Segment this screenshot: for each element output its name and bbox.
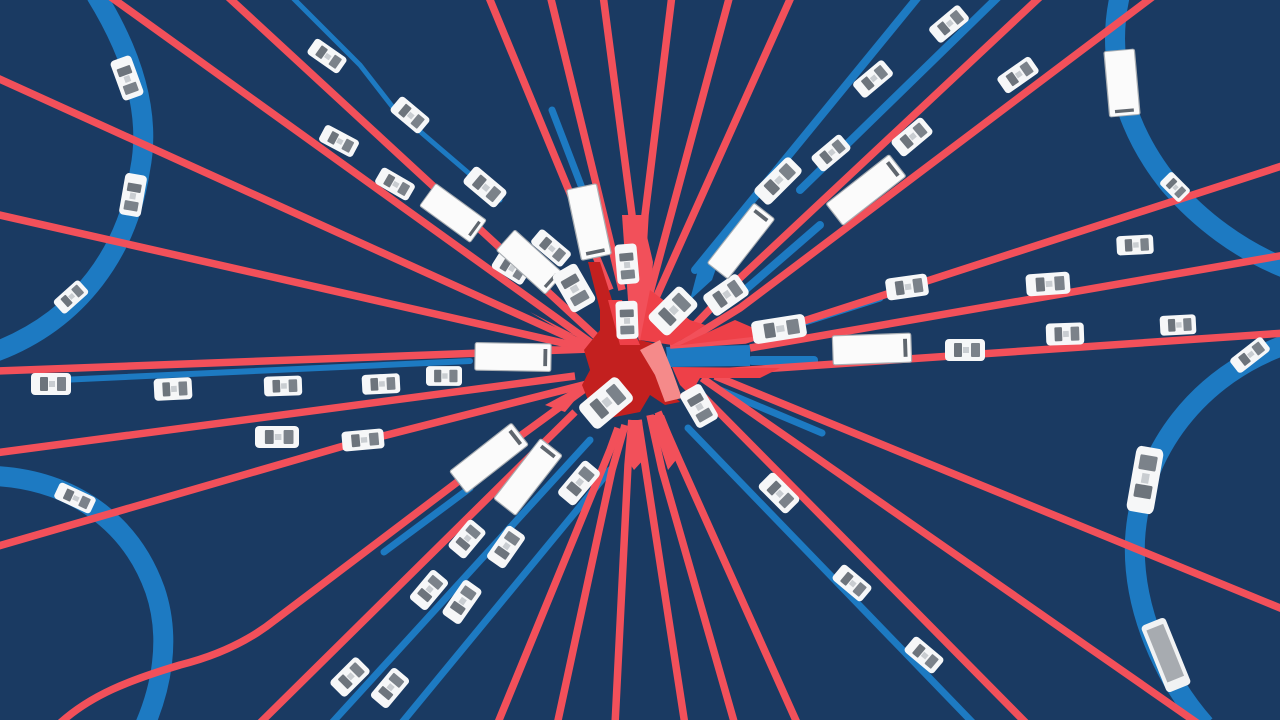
red merged wedge lower left (545, 377, 597, 412)
red wedges (640, 290, 705, 345)
vehicles: right curved road (1126, 445, 1192, 693)
blue stub right of crash (748, 356, 818, 365)
vehicles: upper left (52, 37, 611, 315)
vehicles: lower centre and bottom (329, 375, 945, 710)
pink shard (640, 340, 682, 402)
vehicles: upper middle and right (614, 4, 1191, 345)
vehicles: right lanes (832, 234, 1271, 374)
red merged stems bottom (626, 420, 645, 470)
blue straight lanes (60, 0, 998, 720)
red impact blob (582, 262, 680, 418)
blue band right of crash (666, 345, 750, 367)
vehicles: left lanes (31, 343, 551, 514)
red merged wedge left (500, 312, 598, 350)
red merged stem bottom right (652, 415, 680, 470)
crash centre (582, 262, 780, 418)
blue wedge upper right (690, 228, 730, 300)
red merged stem top (622, 215, 653, 345)
